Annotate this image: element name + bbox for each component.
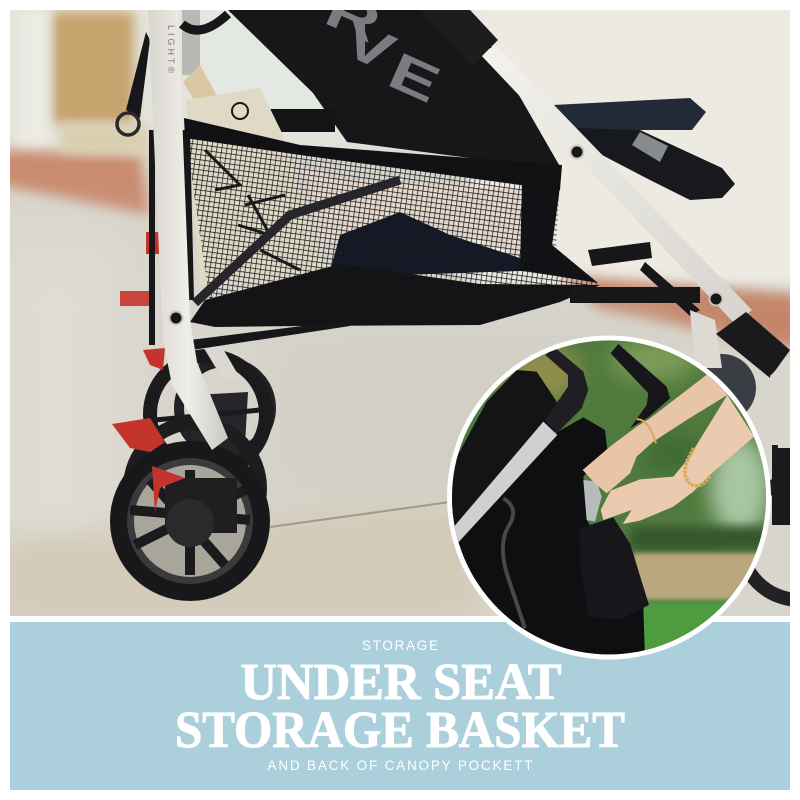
caption text block — [175, 638, 625, 773]
inset silver bar — [454, 422, 557, 542]
left silver post — [148, 10, 228, 450]
inset phone — [583, 480, 602, 522]
inset first arm and hand — [583, 372, 727, 493]
right lower wheel — [748, 479, 790, 606]
red brake pedals — [112, 232, 185, 512]
canopy lettering — [326, 10, 440, 103]
right lower post — [690, 310, 722, 368]
front wheel — [110, 441, 270, 601]
top bar clip — [470, 10, 498, 56]
basket contents and mesh — [185, 130, 600, 305]
basket bottom fabric — [190, 264, 600, 327]
inset first handle — [545, 348, 588, 433]
black cuff — [716, 312, 790, 378]
inset stroller back with fabric — [453, 417, 645, 658]
rear rod — [182, 10, 200, 75]
bag inside basket — [183, 65, 300, 272]
inset second handle — [611, 344, 670, 428]
inset white ring — [447, 336, 771, 660]
blurred background: ground, wall and brick — [0, 0, 800, 620]
dark vertical rod — [149, 130, 155, 345]
rear right wheel — [706, 354, 756, 412]
canopy with RVE lettering — [228, 0, 562, 170]
armrest pads — [553, 98, 735, 200]
inset photo — [452, 340, 766, 654]
right post clamp — [772, 445, 790, 525]
basket top band — [184, 118, 562, 190]
back rod behind the bag — [265, 109, 335, 132]
inset gold bracelets — [637, 419, 711, 486]
left hanging strap and ring — [117, 32, 150, 135]
mesh strap — [195, 180, 400, 303]
diagonal silver bar — [478, 46, 752, 324]
canopy lettering: E — [380, 42, 448, 114]
headline line 1: UNDER SEAT — [240, 654, 562, 711]
inset pocket flap — [579, 517, 649, 619]
canopy lettering: V — [335, 10, 403, 82]
left basket edge — [186, 130, 190, 300]
post brand text: LIGHT® — [166, 25, 176, 76]
frame screws — [170, 146, 722, 324]
inset blurred garden background — [452, 340, 766, 654]
circular inset: pocket close-up — [440, 330, 780, 663]
inset canopy — [450, 370, 557, 543]
blue caption panel — [10, 622, 790, 790]
horizontal rods — [190, 242, 700, 350]
eyebrow: STORAGE — [362, 638, 438, 653]
inset second arm and hand — [601, 395, 754, 524]
subtitle: AND BACK OF CANOPY POCKETT — [268, 758, 532, 773]
inset strap — [503, 498, 525, 628]
photo: stroller on sidewalk — [0, 0, 800, 620]
rear wheels — [124, 349, 276, 498]
headline line 2: STORAGE BASKET — [175, 702, 625, 759]
rear post — [204, 349, 236, 372]
right silver post — [770, 356, 790, 448]
canopy frame hook — [182, 14, 228, 30]
